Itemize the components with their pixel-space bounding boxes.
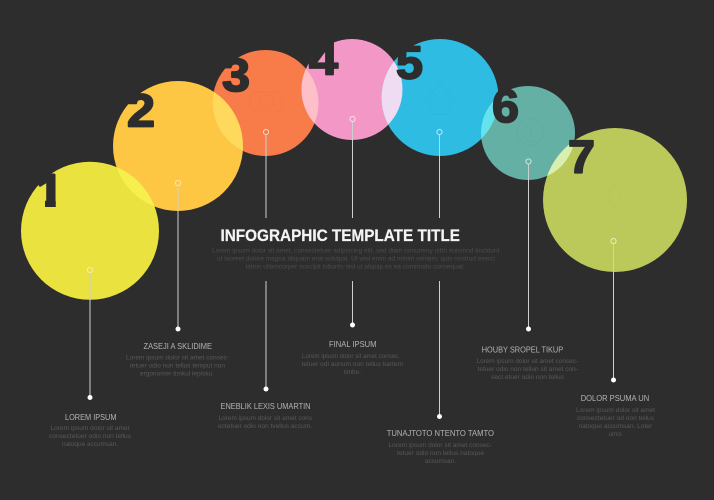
- icon: circle 3 speech bubble: [250, 92, 282, 112]
- item 6 text: [476, 346, 578, 381]
- circle 3: orange: [212, 50, 318, 156]
- overlap: circles 4 and 5: [382, 62, 402, 125]
- connector 2: [175, 180, 181, 332]
- item 5 text: tetuer odio non tellus natoque: [397, 450, 485, 457]
- item 6 text: sect etuer odio non tellus: [491, 374, 564, 381]
- circle 2: amber: [113, 81, 243, 211]
- connector 1: [87, 267, 93, 400]
- title: INFOGRAPHIC TEMPLATE TITLE: [220, 227, 460, 245]
- item 7 text: DOLOR PSUMA UN: [581, 394, 649, 403]
- connector 5: [437, 129, 442, 419]
- number 2: 2: [127, 84, 155, 136]
- number 1: 1: [37, 165, 63, 217]
- number 3: 3: [222, 49, 250, 101]
- number 5: 5: [396, 36, 423, 88]
- item 7 text: Lorem ipsum dolor sit amet: [576, 407, 655, 414]
- item 6 text: HOUBY SROPEL TIKUP: [482, 346, 563, 354]
- overlap: circles 3 and 4: [302, 69, 318, 123]
- item 6 text: Lorem ipsum dolor sit amet consec-: [476, 358, 578, 365]
- description: [212, 248, 500, 270]
- connector 6: [526, 159, 531, 332]
- item 7 text: consectetuer od non tellus: [577, 415, 654, 422]
- item 3 text: ectetuer odio non tvellus accum.: [218, 423, 312, 430]
- item 7 text: [576, 394, 655, 438]
- item 1 text: natoque accumsan.: [62, 441, 118, 448]
- number 7: 7: [568, 130, 595, 182]
- item 7 text: umis: [608, 431, 622, 438]
- item 5 text: accumsan.: [425, 458, 456, 465]
- item 1 text: consectetuer odio non tellus: [49, 433, 131, 440]
- item 4 text: limbo.: [344, 369, 361, 376]
- item 2 text: ergonomer timkul lepisku.: [140, 370, 214, 378]
- connector 7: [611, 238, 616, 382]
- item 3 text: [218, 402, 312, 430]
- overlap: circles 2 and 3: [212, 92, 243, 151]
- circle 6: teal: [481, 86, 575, 180]
- overlap: circles 6 and 7: [547, 144, 573, 176]
- circle 5: blue: [382, 39, 498, 156]
- item 2 text: tetuer odio non tellus temput non: [130, 362, 226, 370]
- circle 1: yellow: [21, 162, 159, 300]
- overlap: circles 5 and 6: [481, 102, 495, 139]
- item 1 text: Lorem ipsum dolor sit amet: [50, 425, 130, 432]
- description: tation ullamcorper suscipit lobortis nisl ut aliquip ex ea commodo consequat.: [246, 264, 465, 270]
- icon: circle 4 pencil: [340, 82, 365, 107]
- item 4 text: FINAL IPSUM: [329, 340, 377, 349]
- item 1 text: LOREM IPSUM: [65, 413, 117, 422]
- item 4 text: tetuer odi aonum non tellus kartem: [302, 361, 403, 368]
- item 4 text: [302, 340, 403, 376]
- number 6: 6: [492, 80, 519, 132]
- circle 7: olive green: [543, 128, 687, 272]
- item 5 text: Lorem ipsum dolor sit amet consec-: [388, 442, 492, 449]
- description: ut laoreet dolore magna aliquam erat volutpat. Ut wisi enim ad minim veniam, quis nostrud exerci: [217, 256, 495, 262]
- connector 4: [350, 116, 355, 328]
- item 1 text: [49, 413, 131, 448]
- item 2 text: [126, 342, 229, 378]
- icon: circle 6 globe: [517, 119, 543, 145]
- item 3 text: Lorem ipsum dolor sit amet cons: [218, 415, 312, 422]
- connector 3: [263, 129, 269, 392]
- item 7 text: natoque accumsan. Loter: [578, 423, 652, 430]
- circle 4: pink: [302, 39, 402, 140]
- icon: circle 5 house: [425, 84, 455, 114]
- item 5 text: [387, 429, 494, 465]
- description: Lorem ipsum dolor sit amet, consectetuer adipiscing elit, sed diam nonummy nibh euismod tincidunt: [212, 248, 500, 254]
- number 4: 4: [309, 32, 338, 84]
- overlap: circles 1 and 2: [116, 167, 154, 206]
- item 5 text: TUNAJTOTO NTENTO TAMTO: [387, 429, 494, 438]
- item 3 text: ENEBLIK LEXIS UMARTIN: [220, 402, 311, 411]
- item 2 text: ZASEJI A SKLIDIME: [144, 342, 212, 351]
- item 2 text: Lorem ipsum dolor sit amet consec-: [126, 354, 229, 362]
- item 6 text: tetuer odio non tellun sit amet con-: [478, 366, 578, 373]
- item 4 text: Lorem ipsum dolor sit amet consec.: [302, 353, 400, 360]
- icon: circle 7 bulb: [609, 185, 621, 207]
